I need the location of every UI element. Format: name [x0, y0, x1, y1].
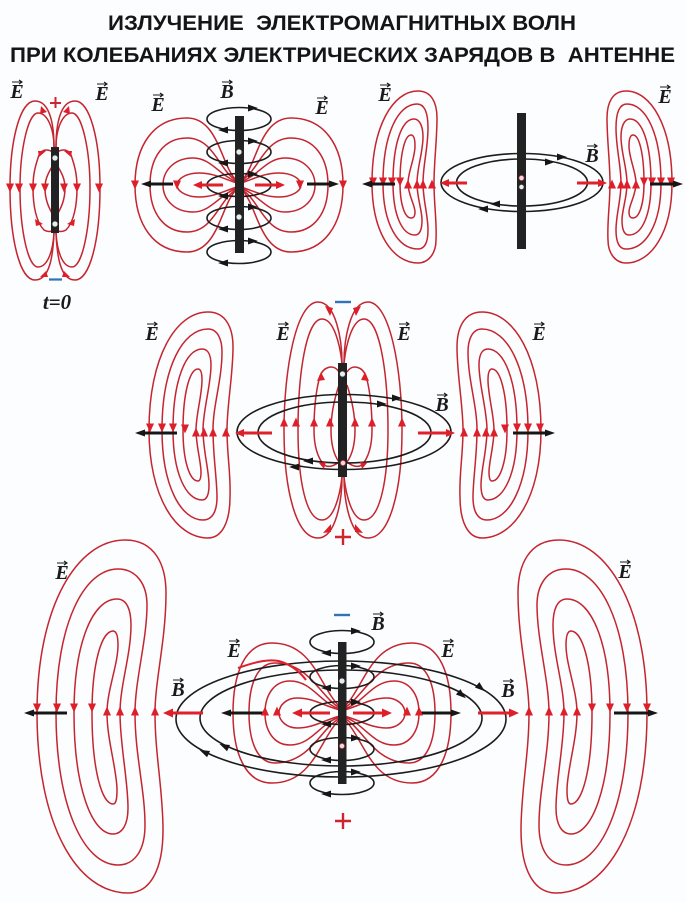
title: ПРИ КОЛЕБАНИЯХ ЭЛЕКТРИЧЕСКИХ ЗАРЯДОВ В АНТЕННЕ	[10, 43, 675, 67]
label: t=0: t=0	[43, 290, 72, 314]
panel: dipole with pinched field	[131, 80, 347, 266]
label: E far left: E	[54, 562, 69, 584]
title	[10, 11, 675, 67]
label: B: B	[434, 394, 449, 416]
label: B: B	[219, 81, 234, 103]
label: E left: E	[150, 94, 165, 116]
label: B top: B	[370, 613, 385, 635]
label: E inner left: E	[275, 323, 290, 345]
label: E inner right: E	[396, 323, 411, 345]
label: E far right: E	[617, 561, 632, 583]
label: E inner right: E	[440, 640, 455, 662]
panel: second half-period	[135, 302, 555, 545]
label: E right: E	[314, 97, 329, 119]
label: E far right: E	[531, 323, 546, 345]
label: B: B	[584, 145, 599, 167]
label: E inner left: E	[226, 640, 241, 662]
label: B left: B	[170, 679, 185, 701]
plus sign	[335, 529, 351, 545]
label: B right: B	[500, 680, 515, 702]
minus sign	[49, 278, 62, 281]
plus sign	[50, 97, 61, 108]
panel: full period radiation	[24, 540, 658, 893]
panel: t=0 antenna field	[6, 80, 109, 314]
label: E left: E	[9, 81, 24, 103]
plus sign	[335, 813, 351, 829]
label: E left: E	[377, 84, 392, 106]
label: E right: E	[657, 86, 672, 108]
minus sign	[335, 301, 351, 303]
label: E far left: E	[144, 323, 159, 345]
title: ИЗЛУЧЕНИЕ ЭЛЕКТРОМАГНИТНЫХ ВОЛН	[108, 11, 576, 35]
panel: detached lobes with magnetic ring	[362, 83, 683, 263]
minus sign	[334, 614, 350, 616]
label: E right: E	[94, 83, 109, 105]
